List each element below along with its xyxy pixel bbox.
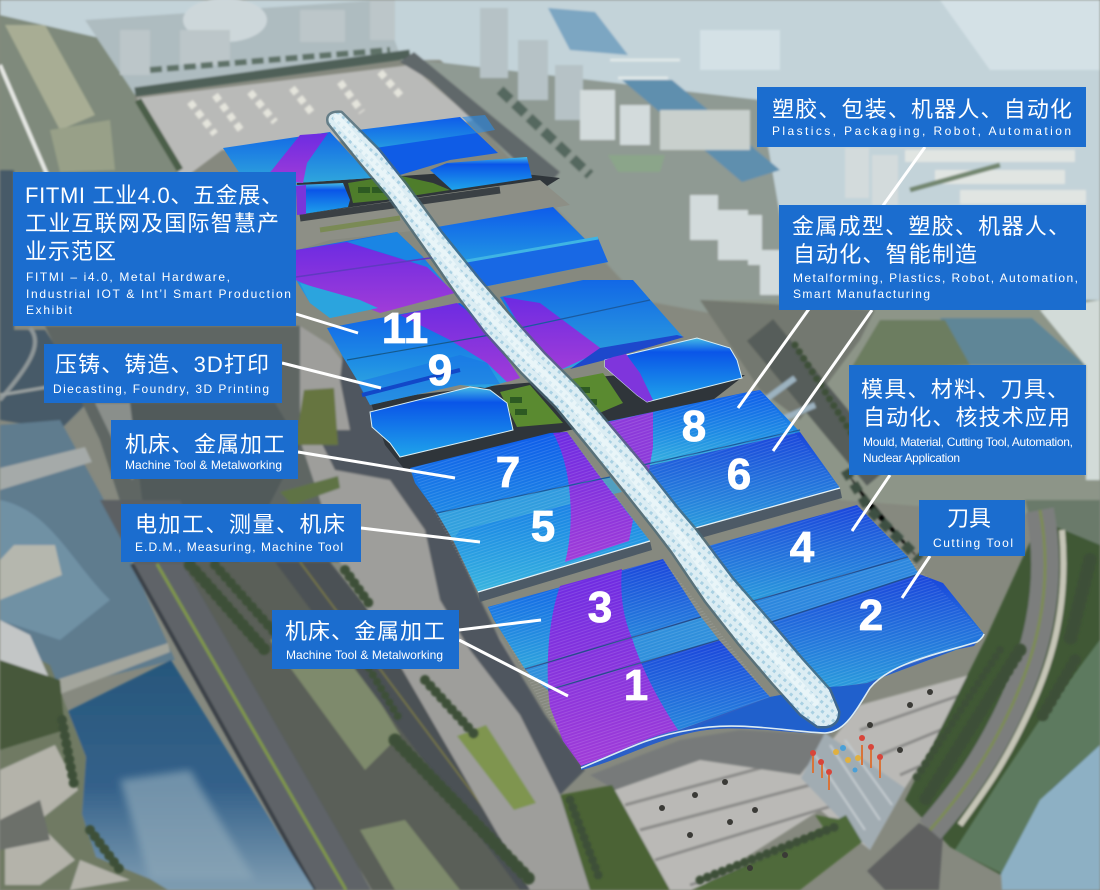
river bridge [50, 643, 170, 695]
haze campus at top [85, 0, 400, 95]
label: FITMI: FITMI 工业4.0、五金展、 [25, 183, 283, 208]
hall 9 and 11 roof [327, 303, 520, 405]
label: FITMI: Exhibit [26, 303, 73, 317]
bus parking strip [182, 562, 540, 890]
label: diecasting [44, 344, 282, 403]
hall numbers: 8 [682, 402, 706, 451]
front plaza [612, 672, 980, 890]
canopy white edge [581, 634, 984, 768]
label: plastics [757, 87, 1086, 147]
left garden [560, 785, 670, 890]
lower left land [0, 640, 168, 890]
leader lines [282, 147, 930, 696]
hall numbers: 6 [727, 450, 751, 499]
tree rows [62, 345, 1090, 880]
hall numbers: 4 [790, 523, 815, 572]
label: cutting tool: 刀具 [947, 506, 991, 531]
upper left parking blocks [0, 15, 182, 180]
building shadows and dark gaps [297, 170, 745, 470]
hall 6 and 8 roof [600, 390, 842, 541]
exhibition halls roofs [223, 115, 984, 770]
label: plastics: 塑胶、包装、机器人、自动化 [772, 97, 1072, 122]
label: plastics: Plastics, Packaging, Robot, Automation [772, 124, 1071, 138]
hall numbers: 3 [588, 583, 612, 632]
label: EDM: 电加工、测量、机床 [135, 512, 345, 537]
hall numbers [382, 304, 883, 710]
hall numbers: 9 [428, 346, 452, 395]
small cross roofs [370, 338, 742, 457]
label: metalforming: 金属成型、塑胶、机器人、 [792, 214, 1070, 239]
label: diecasting: Diecasting, Foundry, 3D Printing [53, 382, 269, 396]
upper left hall [296, 232, 455, 318]
hall numbers: 2 [859, 591, 883, 640]
far left upper water [0, 170, 90, 430]
left road band [45, 326, 360, 562]
label: FITMI: 工业互联网及国际智慧产 [25, 211, 279, 236]
pale towers [580, 90, 898, 295]
label: machine tool upper: 机床、金属加工 [125, 432, 285, 457]
label: mould: 模具、材料、刀具、 [861, 377, 1069, 402]
label: EDM [121, 504, 361, 562]
upper right hall [437, 207, 608, 288]
right hall behind hall 8 [500, 280, 684, 370]
label: mould: 自动化、核技术应用 [863, 405, 1070, 430]
label: machine tool lower: 机床、金属加工 [285, 619, 445, 644]
label: mould [849, 365, 1086, 475]
label: mould: Nuclear Application [863, 451, 960, 465]
roof louvre texture [410, 390, 984, 765]
label: cutting tool: Cutting Tool [933, 536, 1013, 550]
hall numbers: 1 [624, 661, 648, 710]
back right hall [358, 115, 532, 190]
hall 5 and 7 roof [410, 432, 652, 602]
bank trees and lower right water [955, 640, 1100, 875]
top canals [548, 8, 628, 55]
label: machine tool lower: Machine Tool & Metalworking [286, 648, 443, 662]
front apron canopy [581, 642, 977, 770]
left water [0, 420, 175, 690]
label: EDM: E.D.M., Measuring, Machine Tool [135, 540, 343, 554]
central mesh tube walkway [328, 113, 838, 726]
hall 1 and 3 roof [488, 559, 770, 766]
hall numbers: 11 [382, 304, 428, 353]
courtyards [348, 175, 450, 203]
lower river [68, 660, 314, 890]
hazy city top and right [0, 0, 1100, 330]
plaza palms [659, 689, 933, 871]
hall numbers: 5 [531, 502, 555, 551]
road deck [100, 500, 370, 890]
second road [275, 562, 570, 890]
label: cutting tool [919, 500, 1025, 556]
label: diecasting: 压铸、铸造、3D打印 [55, 352, 269, 377]
label: machine tool upper [111, 420, 298, 479]
plaza left of halls [300, 326, 590, 890]
ground between halls [297, 180, 570, 250]
hall 2 and 4 roof [701, 505, 984, 690]
label: machine tool upper: Machine Tool & Metalworking [125, 458, 282, 472]
back left hall [223, 132, 372, 215]
balloons on entrance plaza [810, 735, 883, 790]
right side ground [700, 300, 1100, 520]
label: metalforming: Metalforming, Plastics, Robot, Automation, [793, 271, 1078, 285]
road right of park [400, 52, 560, 188]
label: metalforming: Smart Manufacturing [793, 287, 930, 301]
label: metalforming: 自动化、智能制造 [793, 242, 977, 267]
label: metalforming [779, 205, 1086, 310]
label: mould: Mould, Material, Cutting Tool, Automation, [863, 435, 1073, 449]
label: FITMI: FITMI – i4.0, Metal Hardware, [26, 270, 230, 284]
label: FITMI: 业示范区 [25, 239, 116, 264]
label: FITMI [13, 172, 296, 326]
hall numbers: 7 [496, 448, 520, 497]
label: FITMI: Industrial IOT & Int’l Smart Production [26, 287, 291, 301]
curved road and greenery [905, 520, 1100, 880]
label: machine tool lower [272, 610, 459, 669]
car park [137, 65, 474, 180]
